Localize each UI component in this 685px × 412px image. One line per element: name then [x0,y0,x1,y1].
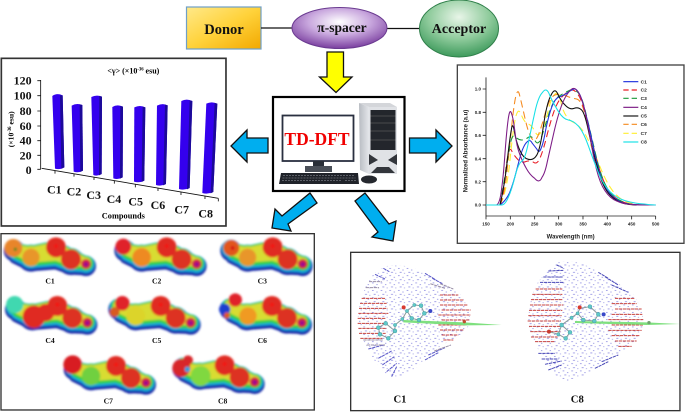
x axis: C4 [107,192,121,206]
axes: 0.6 [475,133,482,138]
axes: 450 [628,222,636,227]
ESP labels: C7 [104,397,113,406]
ESP labels: C6 [258,336,267,345]
y axis: 120 [14,74,32,88]
box: Donor: Donor [204,22,244,38]
molecule C5 [110,296,196,328]
arrow: to ESP maps [272,193,317,231]
axes: 300 [555,222,563,227]
panel: gamma bar chart [1,58,226,226]
y axis: 60 [20,119,32,133]
legend [623,79,647,146]
y axis: esu) [6,111,15,126]
molecule model C1 [376,303,502,340]
x axis: C7 [174,202,189,216]
molecule C3 [223,237,308,269]
molecule C6 [219,293,307,328]
chart title: esu) [144,66,160,75]
legend: C4 [641,105,647,111]
axes: 0.2 [475,179,482,184]
arrow: to spectrum [410,130,452,162]
molecule C1 [4,237,91,269]
panel: ESP maps [1,234,314,410]
arrow: yellow down [320,52,352,92]
curves [486,88,656,205]
arrow: to bar chart [231,130,268,162]
legend: C7 [641,131,647,137]
axes: 400 [604,222,612,227]
legend: C2 [641,88,647,94]
field labels: C1 [393,394,407,405]
label: TD-DFT: TD-DFT [284,129,350,149]
molecule C4 [6,296,92,328]
y axis: (×10 [6,133,15,147]
ESP labels: C1 [45,277,55,286]
legend: C1 [641,79,647,85]
legend: C5 [641,114,647,120]
x axis: C2 [67,184,81,198]
connector lines [261,27,419,30]
y axis: 80 [20,104,32,118]
field labels [393,394,584,405]
field C8 [528,261,644,382]
y axis: 40 [20,134,32,148]
panel: absorbance spectrum [457,65,684,243]
y axis: 20 [20,148,32,162]
x axis: C1 [47,182,62,196]
ESP labels: C2 [152,277,162,286]
icon: monitor [282,116,354,172]
axes: Normalized Absorbance (a.u) [463,110,469,192]
ellipse: pi-spacer: π-spacer [317,20,367,35]
x axis [42,168,218,221]
axes: 0.0 [475,203,482,208]
x axis: C8 [198,206,213,220]
chart title: <γ> (×10 [107,66,137,75]
chart title: -36 [137,68,144,73]
y axis: 0 [26,163,32,177]
axes: 250 [531,222,539,227]
axes: 200 [507,222,515,227]
arrow: to field maps [355,193,396,241]
molecule C7 [63,355,151,388]
axes: 150 [482,222,490,227]
icon: tower [359,103,397,174]
x axis: Compounds [102,212,146,221]
panel: TD-DFT computer [273,97,404,191]
y axis [6,74,41,177]
x axis: C3 [86,188,101,202]
y axis: 100 [14,89,32,103]
panel: field maps [351,252,680,411]
icon: keyboard [279,173,359,184]
ESP labels: C3 [258,277,267,286]
x axis: C5 [128,195,143,209]
axes: Wavelength (nm) [547,234,595,240]
ellipse: Acceptor: Acceptor [432,22,486,37]
axes: 0.4 [475,156,482,161]
axes: 350 [579,222,587,227]
ellipse: Acceptor [420,0,498,57]
box: Donor [186,7,261,49]
field C1 [358,265,471,378]
ellipse: pi-spacer [292,8,387,48]
molecule C8 [172,355,260,387]
ESP labels: C5 [152,336,162,345]
legend: C8 [641,140,647,146]
bars [52,94,217,194]
axes: 500 [652,222,660,227]
molecule model C8 [547,305,680,340]
axes [463,77,660,240]
molecule C2 [115,237,202,269]
axes: 1.0 [475,87,482,92]
ESP labels [45,277,267,406]
ESP labels: C8 [218,397,227,406]
field labels: C8 [571,394,584,405]
x axis: C6 [151,198,165,212]
legend: C3 [641,96,647,102]
legend: C6 [641,122,647,128]
y axis: -36 [8,126,13,133]
icon: mouse [361,176,377,184]
ESP labels: C4 [45,336,55,345]
axes: 0.8 [475,110,482,115]
